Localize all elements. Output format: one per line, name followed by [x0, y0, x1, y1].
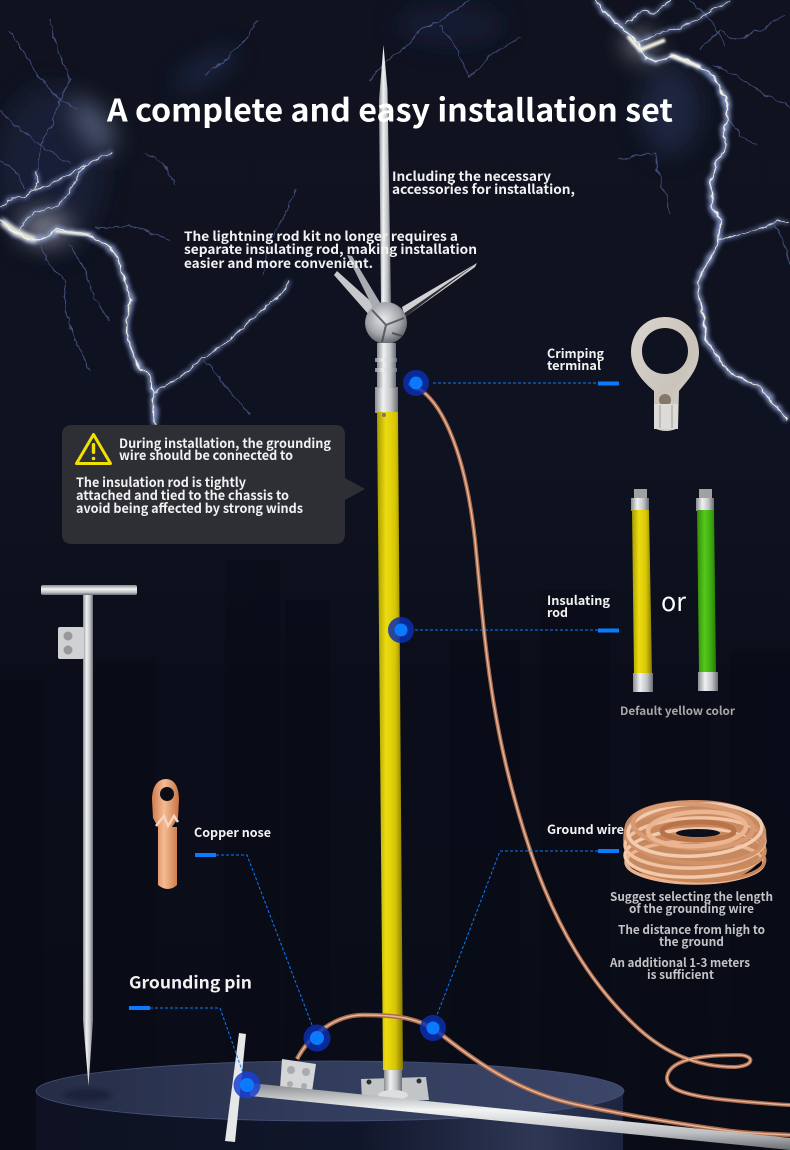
text block: ground wire length advice — [609, 888, 773, 983]
rod: chrome ball — [365, 302, 407, 344]
icon: warning triangle — [76, 434, 110, 464]
lightning rod: spikes, ball, collar and yellow insulating pole — [334, 45, 477, 1101]
marker: grounding pin — [234, 1072, 260, 1098]
marker: crimping terminal — [403, 370, 429, 396]
leader line: crimping terminal — [433, 382, 619, 386]
label: grounding pin: Grounding pin — [129, 968, 252, 994]
text block: no insulating rod note — [184, 226, 477, 272]
text block: ground wire length advice: is sufficient — [647, 966, 714, 983]
rod: yellow insulating pole — [377, 412, 403, 1070]
crimping terminal product — [631, 317, 699, 431]
background: faint city skyline — [0, 560, 790, 1150]
rod: vertical spike — [379, 45, 391, 305]
leader line: grounding pin — [129, 1006, 243, 1073]
text block: accessories note — [392, 166, 575, 198]
text block: accessories note: Including the necessary — [392, 166, 552, 185]
rod: base fitting — [361, 1070, 429, 1101]
grounding pin in use: T bar and long shaft — [225, 1033, 790, 1150]
callout text: wire should be connected to — [119, 445, 293, 464]
label: crimping terminal: terminal — [547, 355, 601, 374]
grounding pin: clamp plate — [58, 627, 84, 659]
copper nose product — [152, 779, 179, 889]
text block: ground wire length advice: the ground — [659, 933, 724, 950]
title: A complete and easy installation set — [106, 86, 673, 130]
marker: insulating rod — [388, 617, 414, 643]
lightning: storm glow and bolts — [0, 0, 790, 425]
grounding plate on T pin — [280, 1059, 316, 1092]
text block: accessories note: accessories for installation, — [392, 179, 575, 198]
green insulating rod product — [696, 489, 718, 691]
label: insulating rod: Insulating — [547, 590, 611, 609]
label: insulating rod — [547, 590, 611, 621]
text block: ground wire length advice: The distance from high to — [618, 921, 765, 938]
label: crimping terminal: Crimping — [547, 343, 605, 362]
rod: side spikes — [334, 255, 477, 317]
label: or: or — [661, 582, 687, 619]
leader line: insulating rod — [415, 628, 619, 632]
text block: ground wire length advice: An additional 1-3 meters — [609, 954, 750, 971]
callout: grounding wire warning — [62, 425, 365, 544]
ground wire coil product — [623, 800, 766, 884]
callout text: attached and tied to the chassis to — [76, 485, 289, 504]
marker: ground wire — [420, 1015, 446, 1041]
ground wire from crimping terminal to lower right loop — [408, 384, 790, 1105]
text block: ground wire length advice: Suggest selecting the length — [610, 888, 773, 905]
leader line: copper nose — [195, 853, 312, 1025]
leader line: ground wire — [437, 849, 619, 1015]
label: copper nose: Copper nose — [194, 822, 271, 841]
rod: metal collars — [375, 343, 398, 413]
callout text: avoid being affected by strong winds — [76, 498, 303, 517]
text block: no insulating rod note: separate insulating rod, making installation — [184, 239, 477, 258]
callout text: During installation, the grounding — [119, 433, 331, 452]
label: ground wire: Ground wire — [547, 819, 624, 838]
grounding pin product — [41, 585, 137, 1086]
label: insulating rod: rod — [547, 602, 568, 621]
pedestal: dark cylinder — [36, 1061, 624, 1150]
callout text: The insulation rod is tightly — [76, 472, 247, 491]
ground wire from copper nose across pole to lower right — [297, 1015, 790, 1135]
label: crimping terminal — [547, 343, 605, 374]
label: default yellow color: Default yellow color — [620, 703, 736, 719]
callout text — [76, 433, 331, 517]
text block: no insulating rod note: easier and more convenient. — [184, 253, 373, 272]
marker: copper nose — [304, 1024, 330, 1052]
text block: ground wire length advice: of the grounding wire — [629, 900, 754, 917]
text block: no insulating rod note: The lightning rod kit no longer requires a — [184, 226, 458, 245]
yellow insulating rod product — [631, 489, 653, 692]
